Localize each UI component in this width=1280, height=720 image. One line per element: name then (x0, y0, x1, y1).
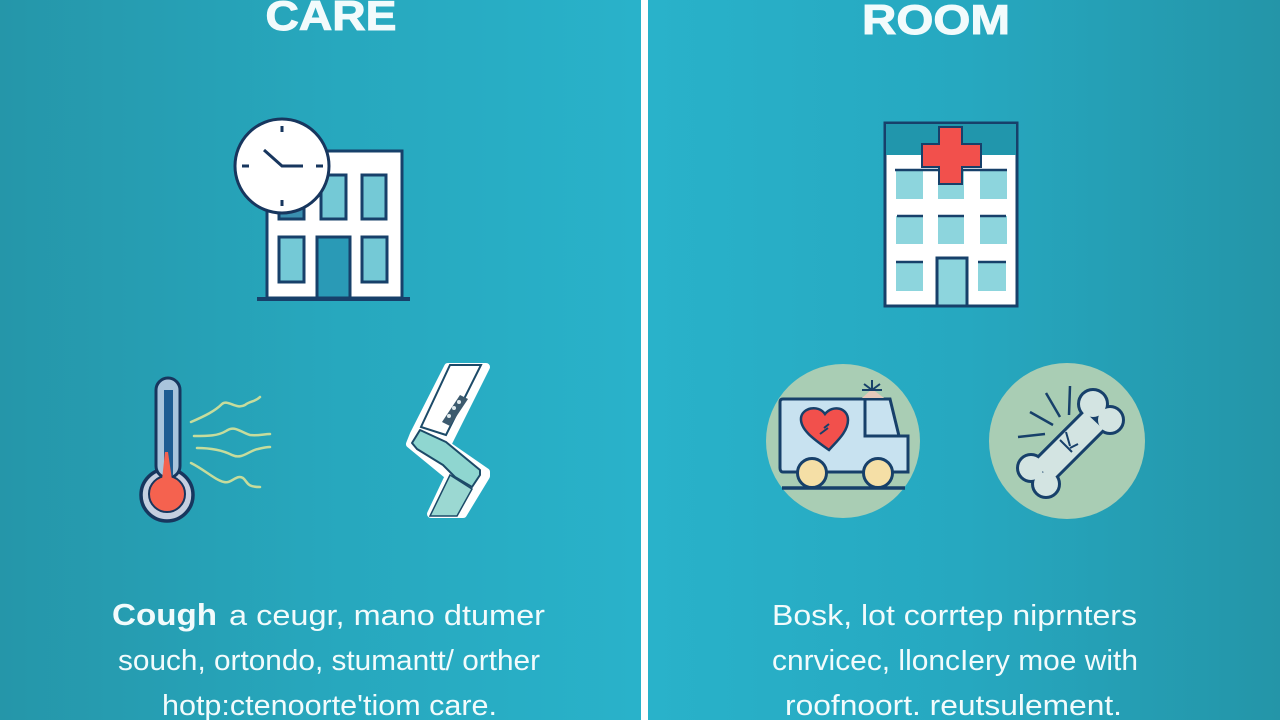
icon: broken bone (989, 363, 1145, 519)
panel: emergency room (648, 0, 1280, 720)
text block: room description: Bosk, lot corrtep niprnters (772, 600, 1137, 632)
icon: red cross (922, 127, 981, 184)
text block: care description: Cough (112, 597, 217, 632)
icon: thermometer with fever waves (141, 378, 270, 521)
text block: care description: souch, ortondo, stumantt/ orther (118, 645, 540, 677)
text block: room description (772, 600, 1138, 720)
text block: care description: a ceugr, mano dtumer (229, 600, 545, 632)
icon: hospital (885, 123, 1017, 306)
panel: urgent care (0, 0, 641, 720)
text block: room description: cnrvicec, lloncIery moe with (772, 645, 1138, 677)
text block: care description (112, 597, 545, 720)
icon: clinic building with clock (235, 119, 410, 299)
icon: ambulance (766, 364, 920, 518)
divider (641, 0, 648, 720)
icon: bandaged knee (410, 365, 486, 516)
